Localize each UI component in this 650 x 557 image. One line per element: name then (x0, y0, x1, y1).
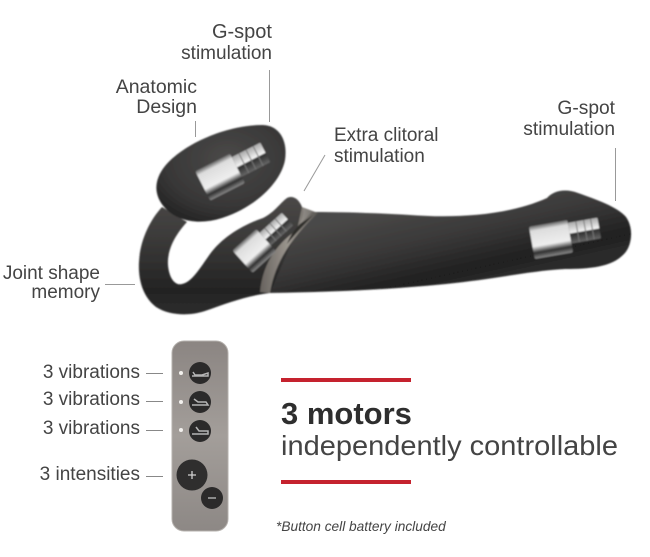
device body: oval bulb (156, 125, 286, 222)
motor: shaft tip (529, 215, 603, 259)
device body: shaft (255, 191, 631, 293)
remote control (172, 341, 228, 531)
plus button (176, 460, 208, 490)
label: Anatomic Design (116, 76, 197, 118)
footnote: *Button cell battery included (276, 519, 446, 534)
leader: Anatomic Design (194, 121, 196, 137)
subheadline: independently controllable (281, 430, 618, 461)
label: Anatomic Design: Anatomic (116, 76, 197, 98)
red rule bottom (281, 480, 411, 484)
leader: top G-spot (268, 70, 270, 122)
collar inner shade (287, 215, 313, 244)
label: G-spot stimulation (top) (181, 21, 272, 64)
product illustration (139, 125, 631, 314)
remote labels: 3 vibrations (43, 362, 140, 383)
label: Extra clitoral stimulation (334, 125, 439, 167)
motor: bulb (195, 139, 273, 201)
label: Joint shape memory: memory (31, 282, 100, 303)
leader: right G-spot (614, 148, 616, 201)
device body: base and loop (139, 197, 303, 314)
label: Joint shape memory: Joint shape (3, 263, 100, 284)
remote leaders (146, 374, 163, 476)
remote labels (40, 362, 140, 485)
mode button icons (192, 372, 208, 434)
label: Joint shape memory (3, 263, 100, 303)
minus button (201, 487, 223, 509)
label: Anatomic Design: Design (136, 96, 197, 118)
label: G-spot stimulation (top): stimulation (181, 43, 272, 64)
leader: Joint shape memory (105, 284, 135, 286)
headline: 3 motors: 3 motors (281, 396, 412, 431)
red rule top (281, 378, 411, 382)
label: G-spot stimulation (right) (523, 98, 616, 140)
leader: Extra clitoral (304, 155, 325, 191)
remote labels: 3 intensities (40, 464, 140, 485)
label: G-spot stimulation (right): stimulation (523, 119, 615, 140)
mode buttons (189, 362, 211, 442)
motor: clitoral arm (232, 209, 299, 273)
label: G-spot stimulation (right): G-spot (557, 98, 616, 119)
remote labels: 3 vibrations (43, 418, 140, 439)
label: Extra clitoral stimulation: stimulation (334, 146, 425, 167)
indicator lights (179, 371, 183, 432)
translucent collar band (260, 207, 318, 293)
remote labels: 3 vibrations (43, 389, 140, 410)
label: G-spot stimulation (top): G-spot (212, 21, 272, 43)
label: Extra clitoral stimulation: Extra clitoral (334, 125, 439, 146)
